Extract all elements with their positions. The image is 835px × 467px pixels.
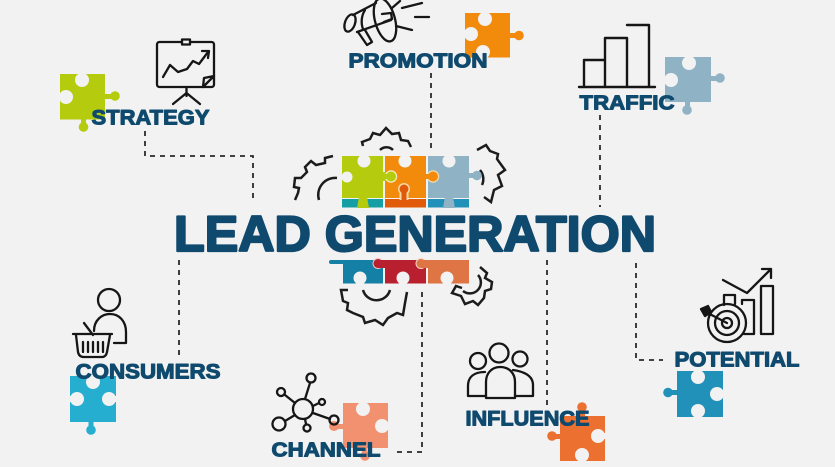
group: influence [466,344,606,462]
dashed connector: influence [546,260,548,405]
dashed connector: promotion [430,73,432,148]
puzzle: blue [663,370,724,418]
icon: shopper with basket [73,289,126,357]
dashed connector: channel [395,292,422,452]
label: PROMOTION [348,50,488,72]
red piece [372,258,426,284]
group: traffic [579,25,725,115]
gear: bottom left [341,290,407,325]
puzzle: salmon [329,402,389,461]
group: promotion [342,0,524,73]
dashed connector: traffic [599,115,601,207]
puzzle: lime [59,73,120,132]
gear: right [477,145,505,202]
icon: group of people [468,344,533,398]
gear: top [362,128,411,150]
label: CONSUMERS [76,360,220,384]
icon: presentation board [157,40,214,104]
green piece [342,154,383,208]
icon: target and growth chart [701,269,773,342]
puzzle: blue-grey [664,56,725,115]
dashed connector: potential [636,263,663,360]
icon: bar chart [579,25,655,87]
label: INFLUENCE [466,408,590,430]
label: CHANNEL [272,438,380,462]
group: potential [663,269,800,418]
puzzle: cyan [69,375,117,435]
coral piece [416,258,469,284]
icon: megaphone [342,0,429,45]
blue-grey piece [426,154,482,208]
label: STRATEGY [92,106,210,130]
group: strategy [59,40,214,132]
icon: network [272,374,338,432]
dashed connector: consumers [178,260,180,358]
gear: bottom right [452,267,492,305]
central puzzle: bottom row [329,258,469,284]
group: channel [272,374,389,462]
teal piece [329,260,383,284]
label: TRAFFIC [580,92,675,114]
main title: LEAD GENERATION [174,206,656,262]
dashed connector: strategy [145,131,253,202]
puzzle: orange-red [547,402,606,462]
label: POTENTIAL [674,348,800,372]
group: consumers [69,289,220,435]
orange piece [383,154,426,208]
puzzle: orange [464,12,524,59]
central puzzle: top row [342,154,482,208]
gear: left [294,156,337,200]
